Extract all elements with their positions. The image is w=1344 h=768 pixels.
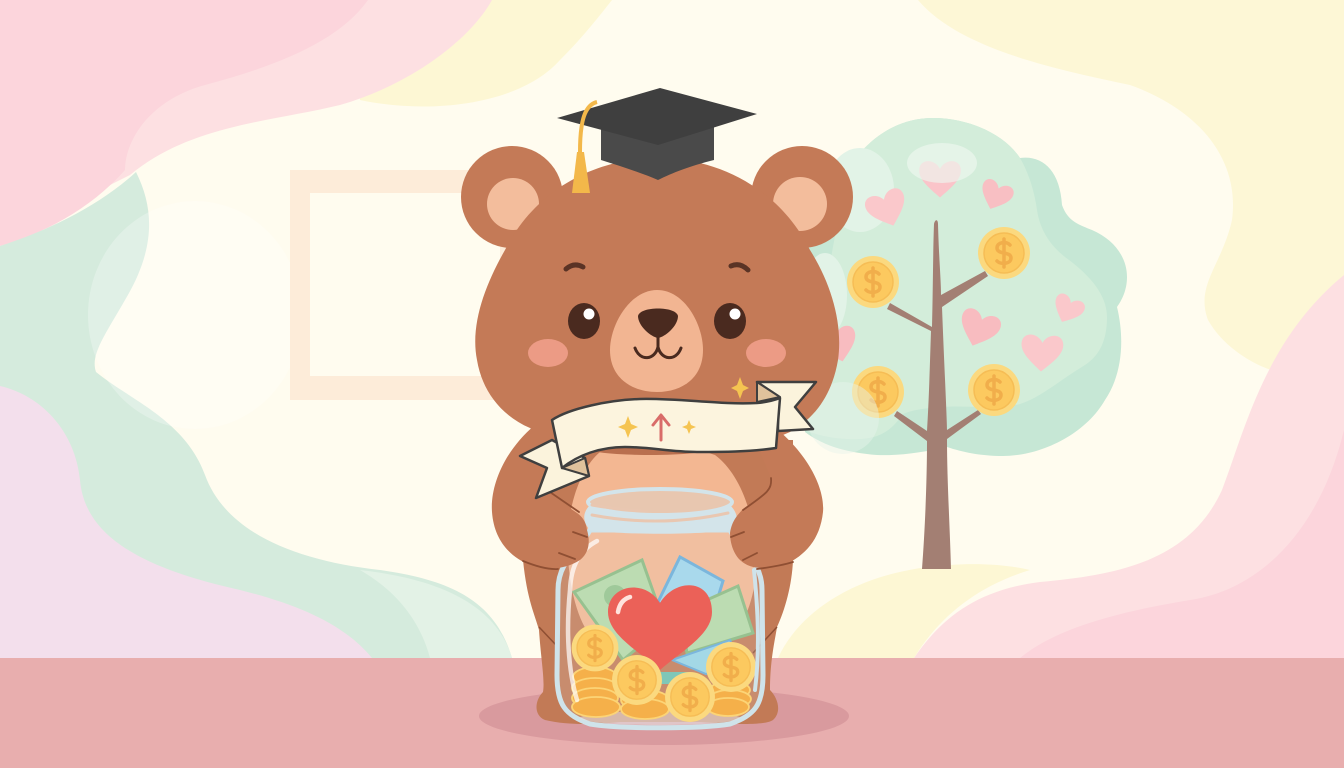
floor shadow bbox=[479, 687, 849, 745]
arm creases bbox=[523, 478, 793, 569]
hearts on tree bbox=[815, 161, 1087, 373]
ribbon arrow bbox=[653, 415, 669, 440]
bear arms bbox=[492, 425, 823, 569]
background blob: green left bbox=[0, 172, 512, 658]
canopy glow left bbox=[826, 148, 894, 232]
jar bbox=[557, 489, 763, 728]
left arm bbox=[492, 425, 589, 568]
ribbon banner bbox=[520, 377, 816, 498]
eyebrows bbox=[566, 265, 748, 270]
banknote blue lower bbox=[672, 640, 738, 674]
jar highlight bbox=[568, 541, 597, 700]
background circle: faint glow bbox=[88, 201, 302, 429]
right arm bbox=[730, 425, 823, 568]
coins on tree bbox=[847, 227, 1030, 418]
ribbon sparkles bbox=[618, 377, 749, 438]
bear bbox=[461, 146, 853, 724]
banknote green right bbox=[680, 586, 753, 653]
coin stacks bbox=[572, 667, 751, 719]
muzzle bbox=[610, 290, 703, 392]
tassel bbox=[580, 102, 597, 152]
leg creases bbox=[539, 627, 777, 653]
canopy glow middle bbox=[803, 253, 847, 337]
canopy highlight bbox=[800, 118, 1107, 439]
heart bbox=[608, 585, 712, 670]
background blob: pink top left bbox=[0, 0, 368, 246]
bear head bbox=[475, 158, 839, 455]
ribbon body bbox=[552, 398, 780, 468]
belly bbox=[568, 447, 756, 646]
cap base bbox=[601, 120, 714, 180]
background blob: lilac bottom left bbox=[0, 386, 372, 658]
background blob: light pink top left bbox=[0, 0, 492, 240]
background blob: right deep pink bbox=[1020, 430, 1344, 658]
right inner ear bbox=[773, 177, 827, 231]
bear lower body and legs bbox=[523, 440, 793, 724]
nose and mouth bbox=[635, 308, 681, 358]
banknote green left seal bbox=[604, 585, 626, 607]
floor bbox=[0, 658, 1344, 768]
jar rim bbox=[584, 505, 737, 534]
left inner ear bbox=[487, 178, 539, 230]
canopy glow lower bbox=[807, 382, 879, 454]
banknote blue bbox=[658, 557, 723, 640]
ribbon left fold bbox=[562, 458, 589, 476]
background blob: right pink bbox=[914, 275, 1344, 658]
ribbon right fold bbox=[757, 382, 780, 402]
ribbon shadow bbox=[590, 443, 710, 455]
jar right highlight bbox=[754, 570, 758, 690]
graduation cap bbox=[557, 88, 757, 193]
background frame bbox=[290, 170, 510, 400]
bear left ear bbox=[461, 146, 563, 248]
background blob: bottom yellow hill bbox=[778, 564, 1030, 658]
heart highlight bbox=[618, 597, 630, 612]
money tree bbox=[800, 118, 1127, 569]
cheeks bbox=[528, 339, 786, 367]
jar lid opening bbox=[588, 489, 732, 515]
ribbon right tail bbox=[757, 382, 816, 431]
tree trunk and branches bbox=[887, 220, 988, 569]
jar glass bbox=[557, 530, 763, 728]
banknote teal lower bbox=[650, 672, 690, 684]
coins in jar bbox=[572, 625, 756, 722]
background blob: top right yellow bbox=[918, 0, 1344, 375]
background blob: pale green overlay bbox=[360, 570, 512, 658]
canopy glow top bbox=[907, 143, 977, 183]
ribbon left tail bbox=[520, 440, 589, 498]
eyes bbox=[568, 303, 746, 339]
bear right ear bbox=[751, 146, 853, 248]
jar base glow bbox=[580, 711, 740, 725]
cap board bbox=[557, 88, 757, 145]
banknote green left bbox=[574, 560, 665, 660]
background blob: top yellow bbox=[360, 0, 612, 107]
tree canopy bbox=[800, 118, 1127, 456]
jar rim lines bbox=[592, 505, 728, 521]
